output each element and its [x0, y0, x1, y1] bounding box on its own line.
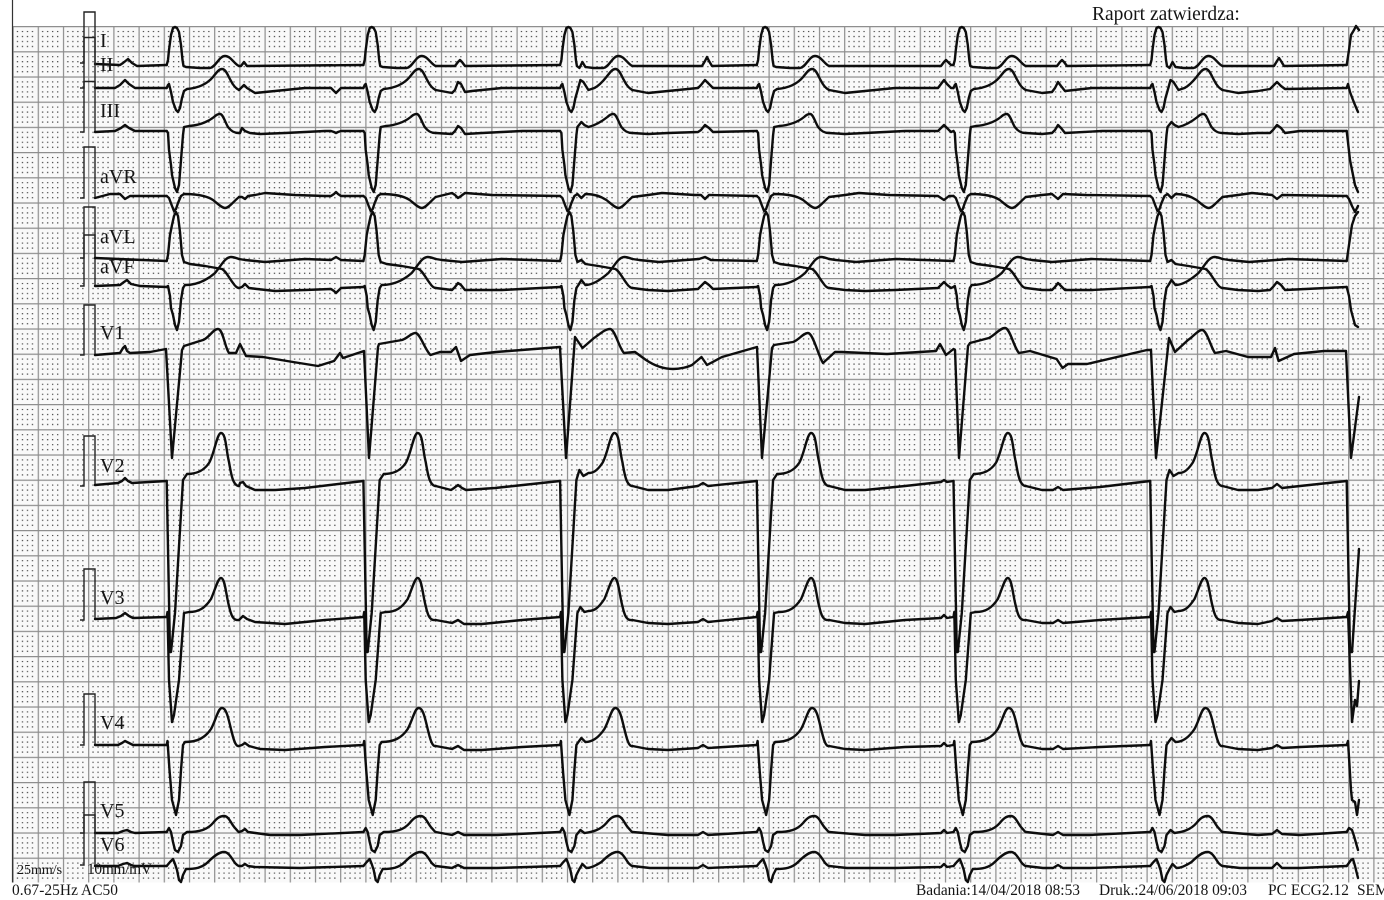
label III: III	[100, 100, 120, 122]
paper speed: 25mm/s	[17, 863, 62, 878]
trace aVR	[95, 192, 1358, 212]
label V6: V6	[100, 834, 124, 856]
calibration pulse aVL	[80, 207, 95, 258]
lead V2	[80, 433, 1359, 652]
trace V5	[95, 816, 1358, 852]
calibration pulse aVR	[80, 147, 95, 198]
trace V3	[95, 578, 1359, 722]
lead V5	[80, 782, 1358, 852]
software version: PC ECG2.12	[1268, 882, 1349, 899]
label V2: V2	[100, 455, 124, 477]
trace V1	[95, 328, 1359, 458]
label aVF: aVF	[100, 256, 134, 278]
calibration pulse II	[80, 38, 95, 88]
label aVR: aVR	[100, 166, 137, 188]
calibration pulse aVF	[80, 235, 95, 286]
lead III	[80, 82, 1358, 192]
label V3: V3	[100, 587, 124, 609]
report approval heading: Raport zatwierdza:	[1092, 4, 1240, 25]
gain: 10mm/mV	[87, 861, 152, 878]
trace V2	[95, 433, 1359, 652]
print date: Druk.:24/06/2018 09:03	[1099, 882, 1247, 899]
lead V1	[80, 305, 1359, 458]
calibration pulse III	[80, 82, 95, 132]
calibration pulse V4	[80, 694, 95, 745]
calibration pulse V6	[80, 815, 95, 865]
trace V6	[95, 852, 1358, 882]
filter settings: 0.67-25Hz AC50	[12, 882, 118, 899]
calibration pulse I	[80, 12, 95, 63]
label I: I	[100, 30, 107, 52]
trace V4	[95, 708, 1359, 815]
trace III	[95, 114, 1358, 192]
traces aVL and aVF	[95, 212, 1358, 330]
label V5: V5	[100, 800, 124, 822]
lead aVR	[80, 147, 1358, 212]
calibration pulse V3	[80, 569, 95, 620]
lead V3	[80, 569, 1359, 722]
lead I	[80, 12, 1359, 68]
label aVL: aVL	[100, 226, 136, 248]
lead V4	[80, 694, 1359, 815]
left axis border	[12, 0, 14, 882]
trace I	[95, 26, 1359, 68]
label V4: V4	[100, 712, 124, 734]
exam date: Badania:14/04/2018 08:53	[916, 882, 1080, 899]
lead V6	[80, 815, 1358, 882]
leads aVL and aVF	[80, 207, 1358, 330]
calibration pulse V5	[80, 782, 95, 833]
calibration pulse V1	[80, 305, 95, 355]
lead II	[80, 38, 1358, 112]
trace II	[95, 69, 1358, 112]
label II: II	[100, 54, 113, 76]
calibration pulse V2	[80, 436, 95, 486]
label V1: V1	[100, 322, 124, 344]
